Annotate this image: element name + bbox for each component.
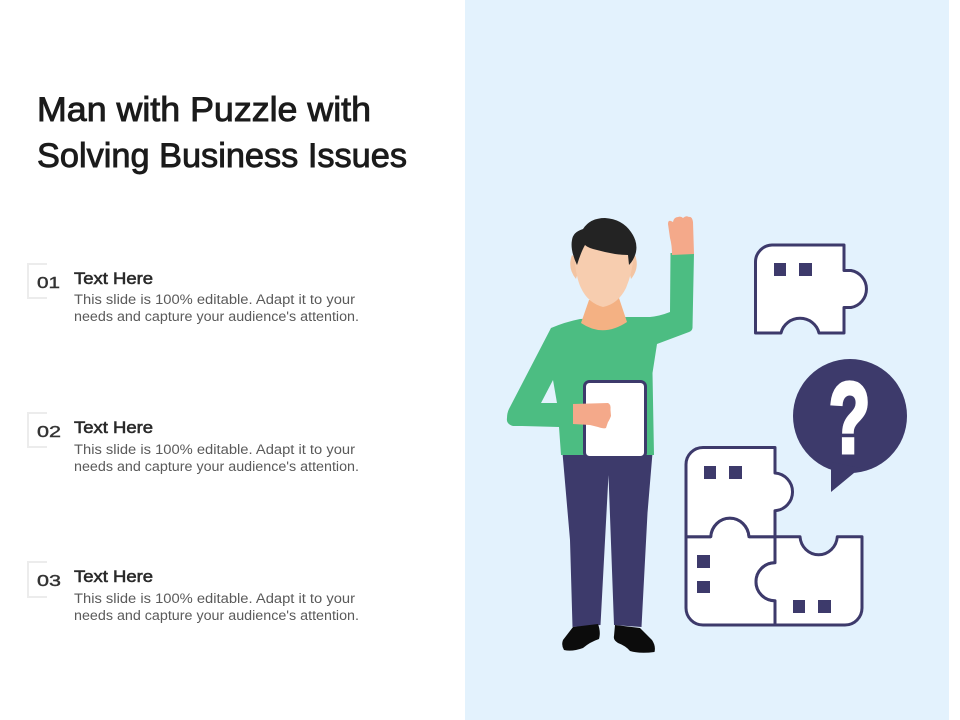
icon: top puzzle piece xyxy=(756,245,866,333)
bottom-left piece xyxy=(686,518,775,625)
list item 02: This slide is 100% editable. Adapt it to your xyxy=(74,442,356,457)
list item 01: Text Here xyxy=(74,269,153,288)
list item 03 xyxy=(28,562,359,623)
icon: question speech bubble: ? xyxy=(829,364,870,475)
list item 03: needs and capture your audience's attention. xyxy=(74,608,359,623)
list item 03: This slide is 100% editable. Adapt it to your xyxy=(74,591,356,606)
list item 03: Text Here xyxy=(74,567,153,586)
icon: three joined puzzle pieces xyxy=(686,448,862,625)
face xyxy=(574,240,634,307)
dots xyxy=(704,466,716,479)
raised hand xyxy=(668,216,694,255)
list item 02: needs and capture your audience's attention. xyxy=(74,459,359,474)
shoes xyxy=(562,624,655,653)
list item 02: 02 xyxy=(37,424,61,441)
title: Solving Business Issues xyxy=(37,137,407,175)
list item 01: 01 xyxy=(37,275,60,292)
title xyxy=(37,91,407,175)
holding hand xyxy=(573,403,611,428)
list item 01: needs and capture your audience's attention. xyxy=(74,309,359,324)
bottom-right piece xyxy=(756,537,862,625)
panel: light blue background xyxy=(465,0,949,720)
title: Man with Puzzle with xyxy=(37,91,371,129)
ears xyxy=(570,255,637,279)
tablet xyxy=(584,382,646,458)
list item 01: This slide is 100% editable. Adapt it to your xyxy=(74,292,356,307)
green sweater xyxy=(507,253,694,455)
top-left piece xyxy=(686,448,793,537)
hair xyxy=(572,218,636,265)
list item 01 xyxy=(28,264,359,324)
list item 02 xyxy=(28,413,359,474)
list item 02: Text Here xyxy=(74,418,153,437)
neck xyxy=(581,298,627,330)
list item 03: 03 xyxy=(37,573,61,590)
trousers xyxy=(562,453,652,627)
icon: question speech bubble xyxy=(793,359,907,492)
illustration: man holding tablet xyxy=(507,216,694,653)
